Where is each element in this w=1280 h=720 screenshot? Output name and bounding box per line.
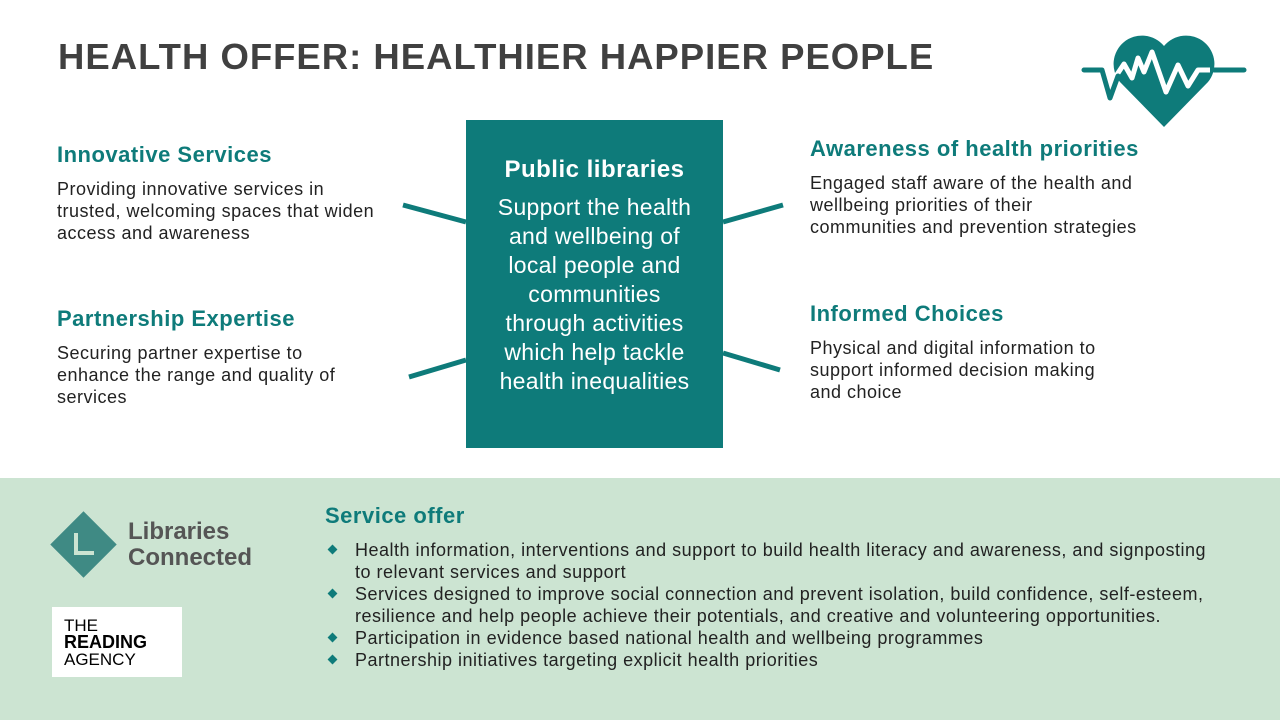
block: informed choices: support informed decision making — [810, 360, 1095, 380]
logo: the reading agency: READING — [64, 632, 147, 652]
logo: the reading agency: AGENCY — [64, 650, 136, 669]
block: partnership expertise: services — [57, 387, 127, 407]
logo: the reading agency: THE — [64, 616, 98, 635]
panel: public libraries: Support the health — [498, 194, 691, 220]
block: awareness: communities and prevention strategies — [810, 217, 1137, 237]
panel: public libraries: local people and — [508, 252, 681, 278]
block: innovative services: Innovative Services — [57, 142, 272, 167]
service offer list: Partnership initiatives targeting explicit health priorities — [355, 650, 818, 670]
service offer list: to relevant services and support — [355, 562, 626, 582]
footer band — [0, 478, 1280, 720]
connector lines — [402, 202, 784, 380]
service offer list: Services designed to improve social connection and prevent isolation, build confidence, self-esteem, — [355, 584, 1203, 604]
block: informed choices: and choice — [810, 382, 902, 402]
service offer heading: Service offer — [325, 503, 465, 528]
block: innovative services: access and awareness — [57, 223, 250, 243]
block: awareness: Awareness of health priorities — [810, 136, 1139, 161]
logo: libraries connected: Libraries — [128, 518, 229, 545]
block: partnership expertise: Partnership Expertise — [57, 306, 295, 331]
service offer list: Participation in evidence based national health and wellbeing programmes — [355, 628, 983, 648]
block: partnership expertise: enhance the range and quality of — [57, 365, 335, 385]
logo: libraries connected: Connected — [128, 544, 252, 571]
block: innovative services — [57, 142, 374, 243]
logo: libraries connected — [50, 511, 252, 578]
block: awareness — [810, 136, 1139, 237]
panel: public libraries: communities — [528, 281, 661, 307]
panel: public libraries: Public libraries — [504, 156, 685, 183]
icon: heart pulse — [1082, 36, 1246, 127]
service offer list: Health information, interventions and support to build health literacy and awareness, and signposting — [355, 540, 1206, 560]
block: awareness: Engaged staff aware of the health and — [810, 173, 1132, 193]
service offer list: resilience and help people achieve their potentials, and creative and volunteering opportunities. — [355, 606, 1161, 626]
block: partnership expertise: Securing partner expertise to — [57, 343, 303, 363]
block: awareness: wellbeing priorities of their — [810, 195, 1033, 215]
logo: the reading agency — [52, 607, 182, 677]
service offer list — [328, 540, 1206, 670]
panel: public libraries: and wellbeing of — [509, 223, 680, 249]
panel: public libraries: health inequalities — [500, 368, 689, 394]
block: innovative services: trusted, welcoming spaces that widen — [57, 201, 374, 221]
block: informed choices — [810, 301, 1096, 402]
block: informed choices: Physical and digital information to — [810, 338, 1096, 358]
block: informed choices: Informed Choices — [810, 301, 1004, 326]
panel: public libraries: through activities — [506, 310, 684, 336]
panel: public libraries: which help tackle — [504, 339, 685, 365]
panel: public libraries — [466, 120, 723, 448]
block: innovative services: Providing innovative services in — [57, 179, 324, 199]
title: HEALTH OFFER: HEALTHIER HAPPIER PEOPLE — [58, 36, 934, 77]
block: partnership expertise — [57, 306, 335, 407]
